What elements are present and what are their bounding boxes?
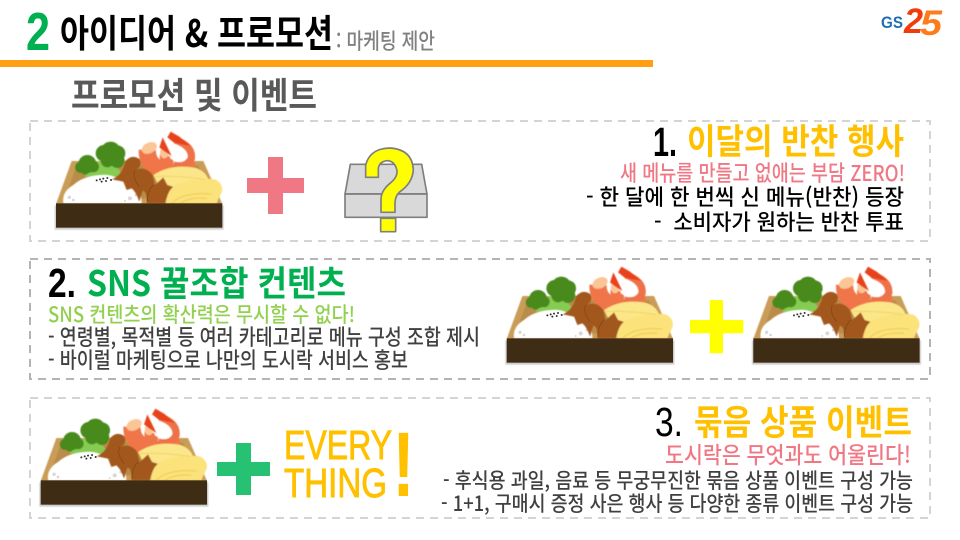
callout: every thing: EVERY xyxy=(284,422,392,468)
callout: every thing: ! xyxy=(392,412,415,516)
callout: every thing: THING xyxy=(284,460,387,506)
panel 3 tagline: 도시락은 무엇과도 어울린다! xyxy=(665,436,911,470)
panel 1 heading: 1. xyxy=(653,119,677,165)
icon: lunch box right xyxy=(752,267,921,365)
panel 2 heading: SNS 꿀조합 컨텐츠 xyxy=(87,256,346,307)
panel 1 heading: 이달의 반찬 행사 xyxy=(687,114,904,165)
panel 2 heading: 2. xyxy=(48,260,76,306)
title: section number 2: 2 xyxy=(26,2,50,62)
title: idea and promotion: 아이디어 & 프로모션 xyxy=(60,3,333,58)
panel 2 bullet two: - 바이럴 마케팅으로 나만의 도시락 서비스 홍보 xyxy=(48,343,408,375)
icon: yellow plus xyxy=(690,300,743,353)
heading: promotions and events: 프로모션 및 이벤트 xyxy=(71,67,317,119)
panel 2 bullet one: - 연령별, 목적별 등 여러 카테고리로 메뉴 구성 조합 제시 xyxy=(48,320,480,352)
panel 3 heading: 3. xyxy=(655,399,683,445)
panel 2 tagline: SNS 컨텐츠의 확산력은 무시할 수 없다! xyxy=(48,299,355,329)
callout: every thing xyxy=(284,412,415,516)
panel: bundle product event xyxy=(30,395,930,518)
icon: mystery box with question mark xyxy=(345,148,427,232)
logo: GS25: 2 xyxy=(903,2,924,41)
panel 1 bullet two: - 소비자가 원하는 반찬 투표 xyxy=(654,205,904,237)
icon: lunch box xyxy=(55,132,224,230)
panel: monthly side dish event xyxy=(30,114,930,241)
panel 1 bullet one: - 한 달에 한 번씩 신 메뉴(반찬) 등장 xyxy=(586,180,904,212)
icon: lunch box left xyxy=(505,267,674,365)
icon: pink plus xyxy=(247,157,304,214)
icon: lunch box xyxy=(39,409,208,507)
logo: GS25: 5 xyxy=(920,4,943,43)
panel: SNS combination content xyxy=(30,256,930,379)
panel 3 heading: 묶음 상품 이벤트 xyxy=(694,395,912,446)
orange header rule xyxy=(0,60,653,67)
logo: GS25 xyxy=(881,2,943,43)
subtitle: marketing proposal: : 마케팅 제안 xyxy=(336,24,435,56)
panel 1 tagline: 새 메뉴를 만들고 없애는 부담 ZERO! xyxy=(620,156,905,188)
icon: green plus xyxy=(217,443,270,495)
logo: GS25: GS xyxy=(881,13,903,32)
